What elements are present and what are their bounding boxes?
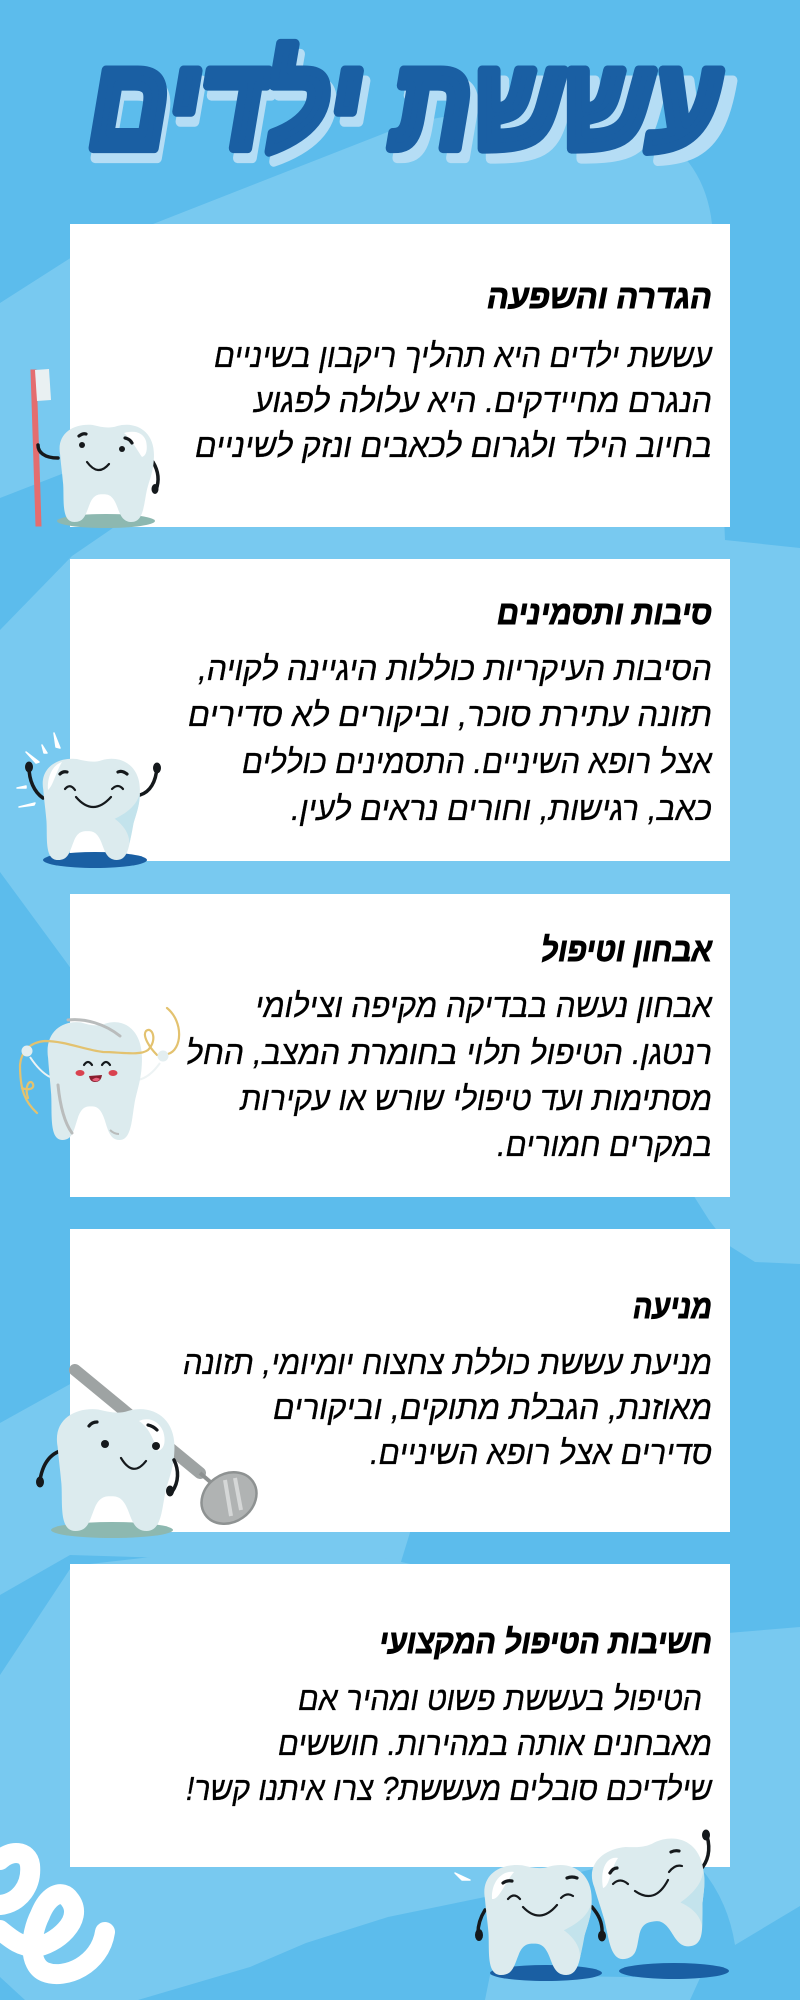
text block: importance: שילדיכם סובלים מעששת? צרו איתנו קשר!	[186, 1770, 713, 1807]
title	[89, 33, 734, 186]
icon: two smiling teeth	[455, 1830, 729, 1981]
text block: causes: אצל רופא השיניים. התסמינים כוללים	[242, 743, 713, 780]
panel: importance of professional treatment	[70, 1564, 730, 1867]
icon: tooth with dental floss	[20, 1008, 179, 1140]
text block: diagnosis: אבחון נעשה בבדיקה מקיפה וצילומי	[255, 987, 713, 1024]
text block: definition: עששת ילדים היא תהליך ריקבון בשיניים	[214, 337, 713, 374]
title shadow: עששת ילדים	[91, 43, 734, 186]
decoration: white squiggle	[0, 1853, 105, 1974]
panel: definition and impact	[70, 224, 730, 527]
icon: tooth with dental mirror	[36, 1370, 267, 1538]
panel: diagnosis and treatment	[70, 894, 730, 1197]
heading: prevention: מניעה	[633, 1288, 712, 1325]
text block: prevention: סדירים אצל רופא השיניים.	[370, 1434, 712, 1471]
text block: definition: הנגרם מחיידקים. היא עלולה לפגוע	[252, 382, 712, 419]
icon: happy tooth with sparkles	[17, 733, 161, 868]
text block: diagnosis: מסתימות ועד טיפולי שורש או עקירות	[239, 1080, 712, 1117]
text block: importance: הטיפול בעששת פשוט ומהיר אם	[298, 1680, 702, 1717]
heading: diagnosis: אבחון וטיפול	[541, 931, 713, 968]
text block: importance	[186, 1680, 713, 1807]
title text: עששת ילדים	[89, 33, 721, 176]
text block: causes: הסיבות העיקריות כוללות היגיינה לקויה,	[198, 650, 712, 687]
heading: definition: הגדרה והשפעה	[487, 278, 712, 315]
heading: importance: חשיבות הטיפול המקצועי	[379, 1623, 712, 1660]
text block: causes	[188, 650, 713, 827]
text block: prevention: מניעת עששת כוללת צחצוח יומיומי, תזונה	[183, 1344, 712, 1381]
panel: causes and symptoms	[70, 559, 730, 861]
tooth: right jumping tooth	[587, 1830, 729, 1979]
text block: diagnosis	[186, 987, 713, 1163]
heading: causes: סיבות ותסמינים	[497, 594, 712, 631]
text block: definition	[195, 337, 713, 464]
text block: diagnosis: במקרים חמורים.	[497, 1126, 712, 1163]
text block: definition: בחיוב הילד ולגרום לכאבים ונזק לשיניים	[195, 427, 712, 464]
panel: prevention	[70, 1229, 730, 1532]
text block: prevention	[183, 1344, 712, 1471]
text block: prevention: מאוזנת, הגבלת מתוקים, וביקורים	[273, 1389, 712, 1426]
text block: causes: תזונה עתירת סוכר, וביקורים לא סדירים	[188, 696, 712, 733]
icon: tooth with toothbrush	[31, 369, 158, 528]
tooth: left smiling tooth	[455, 1865, 606, 1981]
text block: causes: כאב, רגישות, וחורים נראים לעין.	[291, 790, 712, 827]
text block: importance: מאבחנים אותה במהירות. חוששים	[278, 1725, 712, 1762]
text block: diagnosis: רנטגן. הטיפול תלוי בחומרת המצב, החל	[186, 1034, 712, 1071]
